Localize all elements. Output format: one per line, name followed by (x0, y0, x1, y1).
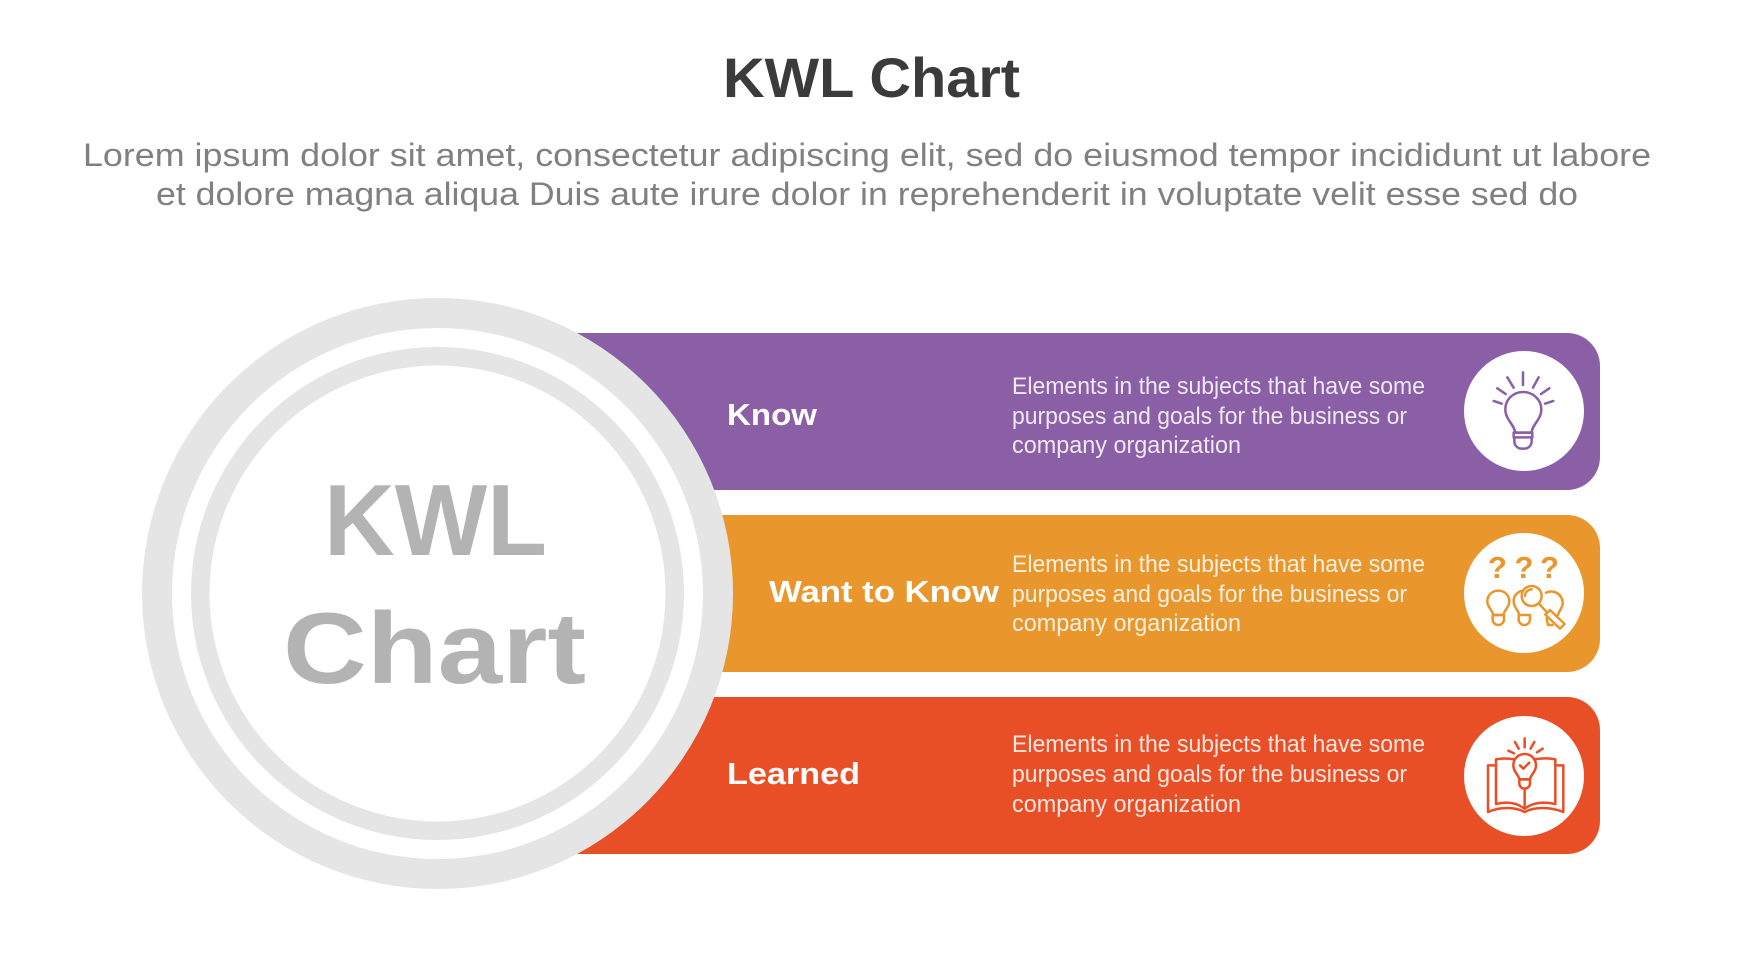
label: Learned: Learned (727, 756, 860, 791)
circle title: Chart (283, 593, 586, 705)
subtitle text: Lorem ipsum dolor sit amet, consectetur adipiscing elit, sed do eiusmod tempor incididunt ut labore (83, 137, 1651, 173)
icon: open book with bulb (1464, 716, 1584, 836)
icon: question marks, bulbs and magnifier: ? (1488, 550, 1507, 585)
icon: question marks, bulbs and magnifier (1464, 533, 1584, 653)
panel: Know bar (480, 333, 1600, 490)
text: Know description: Elements in the subjects that have some (1012, 373, 1425, 400)
panel: Learned bar (480, 697, 1600, 854)
text: Know description (1012, 373, 1425, 459)
label: Know: Know (727, 397, 818, 432)
icon: question marks, bulbs and magnifier: ? (1540, 550, 1559, 585)
text: Learned description: Elements in the subjects that have some (1012, 731, 1425, 758)
text: Learned description: purposes and goals for the business or (1012, 761, 1407, 788)
title: KWL Chart (723, 46, 1020, 109)
text: Learned description (1012, 731, 1425, 818)
circle title (283, 465, 586, 705)
text: Want to Know description: company organization (1012, 610, 1241, 637)
label: Want to Know: Want to Know (769, 574, 1000, 609)
text: Want to Know description: Elements in the subjects that have some (1012, 551, 1425, 578)
panel: Want to Know bar (480, 515, 1600, 672)
subtitle text: et dolore magna aliqua Duis aute irure dolor in reprehenderit in voluptate velit esse sed do (156, 176, 1578, 212)
icon: question marks, bulbs and magnifier: ? (1515, 550, 1533, 585)
text: Know description: company organization (1012, 432, 1241, 459)
text: Want to Know description (1012, 551, 1425, 637)
subtitle text (83, 137, 1651, 212)
central circle badge (142, 298, 733, 889)
circle title: KWL (324, 465, 547, 577)
icon: light bulb (1464, 351, 1584, 471)
text: Learned description: company organization (1012, 791, 1241, 818)
text: Know description: purposes and goals for the business or (1012, 403, 1407, 430)
text: Want to Know description: purposes and goals for the business or (1012, 581, 1407, 608)
